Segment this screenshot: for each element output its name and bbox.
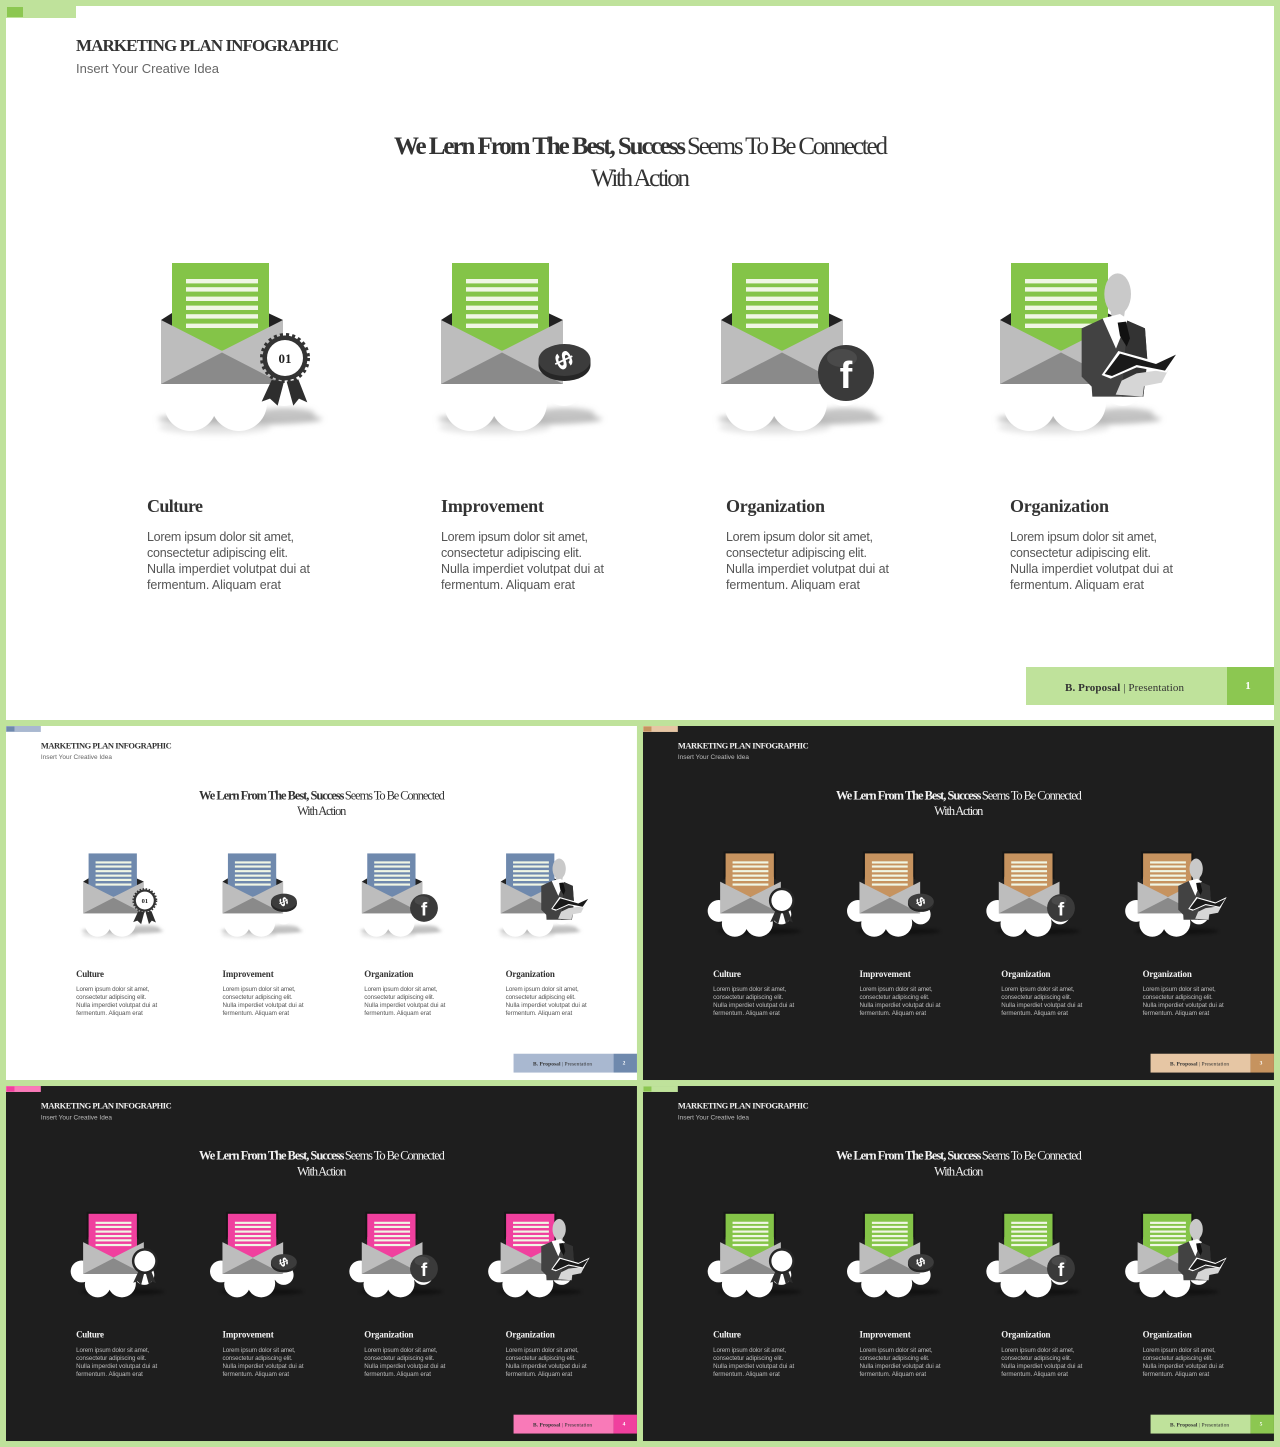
column text 4: Lorem ipsum dolor sit amet, — [1143, 986, 1216, 993]
column text 2: Nulla imperdiet volutpat dui at — [222, 1002, 304, 1009]
column text 1: consectetur adipiscing elit. — [76, 994, 147, 1001]
column text 2: fermentum. Aliquam erat — [222, 1371, 289, 1378]
column heading: Improvement: Improvement — [859, 969, 911, 979]
column heading: Organization: Organization — [726, 496, 825, 516]
column text 3: consectetur adipiscing elit. — [364, 1355, 435, 1362]
icon: envelope with ribbon badge — [71, 1212, 164, 1297]
column text 3: consectetur adipiscing elit. — [1001, 1355, 1072, 1362]
footer bar — [1151, 1415, 1274, 1434]
headline: Seems To Be Connected — [982, 1149, 1083, 1163]
icon: envelope with dollar coin — [210, 1212, 304, 1297]
headline: With Action — [934, 1165, 984, 1179]
icon: envelope with ribbon badge: 01 — [278, 351, 292, 366]
headline: We Lern From The Best, Success — [836, 788, 982, 802]
column heading: Improvement: Improvement — [859, 1330, 911, 1340]
footer bar — [514, 1054, 637, 1073]
panel: small slide, green on dark — [643, 1086, 1274, 1441]
headline: Seems To Be Connected — [345, 1149, 446, 1163]
column heading: Improvement: Improvement — [441, 496, 544, 516]
footer bar: B. Proposal | Presentation — [533, 1062, 592, 1068]
icon: envelope with facebook badge: f — [840, 355, 853, 397]
column text 3: Nulla imperdiet volutpat dui at — [726, 562, 890, 576]
icon: envelope with ribbon badge — [136, 263, 322, 434]
column text 1: Nulla imperdiet volutpat dui at — [76, 1002, 158, 1009]
column text 4: fermentum. Aliquam erat — [1143, 1371, 1210, 1378]
icon: envelope with dollar coin: $ — [913, 895, 929, 909]
column text 2: fermentum. Aliquam erat — [859, 1010, 926, 1017]
column text 1: Nulla imperdiet volutpat dui at — [76, 1363, 158, 1370]
column text 4: Nulla imperdiet volutpat dui at — [506, 1002, 587, 1009]
column heading: Organization: Organization — [506, 1330, 555, 1340]
icon: envelope with dollar coin: $ — [549, 347, 580, 374]
column text 4: Lorem ipsum dolor sit amet, — [506, 1347, 579, 1354]
headline: Seems To Be Connected — [345, 788, 446, 802]
column text 4: Lorem ipsum dolor sit amet, — [506, 986, 579, 993]
icon: envelope with dollar coin — [847, 1212, 941, 1297]
column text 1: Lorem ipsum dolor sit amet, — [713, 986, 787, 993]
footer bar: B. Proposal | Presentation — [1065, 682, 1184, 694]
icon: envelope with facebook badge — [986, 1212, 1080, 1297]
icon: envelope with businessman reading — [1125, 1212, 1227, 1297]
column text 2: Lorem ipsum dolor sit amet, — [222, 1347, 296, 1354]
column text 1: Nulla imperdiet volutpat dui at — [713, 1002, 795, 1009]
headline: With Action — [591, 165, 690, 192]
column text 2: consectetur adipiscing elit. — [859, 1355, 930, 1362]
column text 1: Nulla imperdiet volutpat dui at — [147, 562, 311, 576]
headline: We Lern From The Best, Success — [394, 133, 686, 160]
icon: envelope with facebook badge: f — [421, 1260, 428, 1281]
column text 1: consectetur adipiscing elit. — [76, 1355, 147, 1362]
footer bar: 5 — [1260, 1422, 1263, 1428]
column text 2: Nulla imperdiet volutpat dui at — [222, 1363, 304, 1370]
icon: envelope with businessman reading — [1125, 851, 1227, 937]
column text 1: Lorem ipsum dolor sit amet, — [76, 986, 150, 993]
subtitle: Insert Your Creative Idea — [678, 754, 749, 761]
subtitle: Insert Your Creative Idea — [41, 1114, 112, 1121]
footer bar: 2 — [623, 1061, 626, 1067]
icon: envelope with businessman reading — [488, 853, 590, 938]
column heading: Improvement: Improvement — [222, 969, 274, 979]
column text 2: consectetur adipiscing elit. — [441, 546, 582, 560]
column text 1: Lorem ipsum dolor sit amet, — [76, 1347, 150, 1354]
title: MARKETING PLAN INFOGRAPHIC — [678, 1100, 809, 1110]
icon: envelope with facebook badge: f — [1058, 1260, 1065, 1281]
column text 3: consectetur adipiscing elit. — [726, 546, 867, 560]
column heading: Organization: Organization — [1143, 969, 1192, 979]
column text 1: consectetur adipiscing elit. — [147, 546, 288, 560]
column text 2: Lorem ipsum dolor sit amet, — [859, 986, 933, 993]
footer bar: B. Proposal | Presentation — [533, 1423, 592, 1429]
column text 4: Nulla imperdiet volutpat dui at — [1143, 1363, 1224, 1370]
column text 4: consectetur adipiscing elit. — [506, 1355, 576, 1362]
column text 4: Nulla imperdiet volutpat dui at — [506, 1363, 587, 1370]
panel: small slide, pink on dark — [6, 1086, 637, 1441]
column text 2: Lorem ipsum dolor sit amet, — [441, 530, 588, 544]
column text 1: Lorem ipsum dolor sit amet, — [147, 530, 294, 544]
column text 3: Lorem ipsum dolor sit amet, — [1001, 1347, 1075, 1354]
column text 1: consectetur adipiscing elit. — [713, 994, 784, 1001]
column text 3: Lorem ipsum dolor sit amet, — [1001, 986, 1075, 993]
column text 2: fermentum. Aliquam erat — [222, 1010, 289, 1017]
icon: envelope with ribbon badge: 01 — [142, 898, 148, 905]
footer bar: B. Proposal | Presentation — [1170, 1062, 1229, 1068]
column text 3: Lorem ipsum dolor sit amet, — [364, 1347, 438, 1354]
column text 4: fermentum. Aliquam erat — [1010, 578, 1145, 592]
footer bar: 3 — [1260, 1061, 1263, 1067]
column heading: Culture: Culture — [76, 1330, 104, 1340]
column heading: Culture: Culture — [713, 969, 741, 979]
corner tab — [6, 6, 76, 18]
column heading: Organization: Organization — [1143, 1330, 1192, 1340]
column text 1: fermentum. Aliquam erat — [76, 1371, 143, 1378]
column heading: Organization: Organization — [506, 969, 555, 979]
icon: envelope with facebook badge — [696, 263, 882, 434]
column text 4: consectetur adipiscing elit. — [1010, 546, 1151, 560]
column text 4: consectetur adipiscing elit. — [1143, 994, 1213, 1001]
headline: Seems To Be Connected — [687, 133, 888, 160]
column text 1: fermentum. Aliquam erat — [147, 578, 282, 592]
column text 1: fermentum. Aliquam erat — [713, 1010, 780, 1017]
column text 3: Nulla imperdiet volutpat dui at — [364, 1002, 446, 1009]
icon: envelope with facebook badge — [986, 851, 1080, 937]
column text 3: fermentum. Aliquam erat — [364, 1010, 431, 1017]
column text 4: consectetur adipiscing elit. — [1143, 1355, 1213, 1362]
footer bar: B. Proposal | Presentation — [1170, 1423, 1229, 1429]
column text 3: consectetur adipiscing elit. — [364, 994, 435, 1001]
icon: envelope with dollar coin — [847, 851, 941, 937]
column text 2: Nulla imperdiet volutpat dui at — [859, 1002, 941, 1009]
icon: envelope with dollar coin — [416, 263, 602, 434]
column text 2: Lorem ipsum dolor sit amet, — [859, 1347, 933, 1354]
footer bar: 4 — [623, 1422, 626, 1428]
footer bar — [514, 1415, 637, 1434]
panel: main slide, green on white — [6, 6, 1274, 720]
icon: envelope with ribbon badge — [708, 851, 801, 937]
column heading: Organization: Organization — [364, 969, 414, 979]
icon: envelope with dollar coin: $ — [276, 895, 292, 909]
column text 1: Nulla imperdiet volutpat dui at — [713, 1363, 795, 1370]
corner tab — [6, 726, 41, 732]
headline: Seems To Be Connected — [982, 788, 1083, 802]
column text 4: Nulla imperdiet volutpat dui at — [1010, 562, 1174, 576]
column text 2: consectetur adipiscing elit. — [859, 994, 930, 1001]
title: MARKETING PLAN INFOGRAPHIC — [678, 740, 809, 750]
column text 4: fermentum. Aliquam erat — [506, 1371, 573, 1378]
column text 3: Lorem ipsum dolor sit amet, — [726, 530, 873, 544]
column text 3: fermentum. Aliquam erat — [1001, 1010, 1068, 1017]
column heading: Organization: Organization — [1001, 1330, 1051, 1340]
column text 2: fermentum. Aliquam erat — [859, 1371, 926, 1378]
column text 4: Nulla imperdiet volutpat dui at — [1143, 1002, 1224, 1009]
icon: envelope with dollar coin — [210, 853, 303, 938]
column text 3: Nulla imperdiet volutpat dui at — [1001, 1002, 1083, 1009]
icon: envelope with businessman reading — [488, 1212, 590, 1297]
icon: envelope with ribbon badge — [71, 853, 163, 938]
column text 2: fermentum. Aliquam erat — [441, 578, 576, 592]
column heading: Improvement: Improvement — [222, 1330, 274, 1340]
column text 3: Nulla imperdiet volutpat dui at — [1001, 1363, 1083, 1370]
corner tab — [643, 1086, 678, 1092]
subtitle: Insert Your Creative Idea — [41, 754, 112, 761]
column text 4: fermentum. Aliquam erat — [1143, 1010, 1210, 1017]
column heading: Organization: Organization — [1010, 496, 1109, 516]
column heading: Culture: Culture — [147, 496, 203, 516]
title: MARKETING PLAN INFOGRAPHIC — [76, 36, 339, 55]
headline: We Lern From The Best, Success — [836, 1149, 982, 1163]
icon: envelope with businessman reading — [975, 263, 1179, 434]
column text 4: fermentum. Aliquam erat — [506, 1010, 573, 1017]
column text 2: Lorem ipsum dolor sit amet, — [222, 986, 296, 993]
title: MARKETING PLAN INFOGRAPHIC — [41, 1100, 172, 1110]
headline: With Action — [297, 1165, 347, 1179]
column text 2: Nulla imperdiet volutpat dui at — [859, 1363, 941, 1370]
icon: envelope with facebook badge — [349, 853, 442, 938]
column heading: Organization: Organization — [1001, 969, 1051, 979]
icon: envelope with facebook badge: f — [1058, 898, 1065, 919]
column text 3: fermentum. Aliquam erat — [364, 1371, 431, 1378]
headline: We Lern From The Best, Success — [199, 788, 345, 802]
icon: envelope with facebook badge — [349, 1212, 443, 1297]
column text 3: fermentum. Aliquam erat — [1001, 1371, 1068, 1378]
column text 2: consectetur adipiscing elit. — [222, 1355, 293, 1362]
column text 3: Nulla imperdiet volutpat dui at — [364, 1363, 446, 1370]
corner tab — [643, 726, 678, 732]
icon: envelope with facebook badge: f — [421, 898, 428, 919]
title: MARKETING PLAN INFOGRAPHIC — [41, 740, 172, 750]
subtitle: Insert Your Creative Idea — [678, 1114, 749, 1121]
column text 3: fermentum. Aliquam erat — [726, 578, 861, 592]
column text 1: Lorem ipsum dolor sit amet, — [713, 1347, 787, 1354]
icon: envelope with dollar coin: $ — [276, 1255, 292, 1269]
footer bar — [1151, 1054, 1274, 1073]
column heading: Organization: Organization — [364, 1330, 414, 1340]
footer bar — [1026, 667, 1274, 705]
headline: We Lern From The Best, Success — [199, 1149, 345, 1163]
column text 1: fermentum. Aliquam erat — [713, 1371, 780, 1378]
column heading: Culture: Culture — [76, 969, 104, 979]
panel: small slide, blue on white — [6, 726, 637, 1080]
column text 1: consectetur adipiscing elit. — [713, 1355, 784, 1362]
subtitle: Insert Your Creative Idea — [76, 61, 220, 76]
column text 2: consectetur adipiscing elit. — [222, 994, 293, 1001]
column text 3: Lorem ipsum dolor sit amet, — [364, 986, 438, 993]
icon: envelope with dollar coin: $ — [913, 1255, 929, 1269]
column text 2: Nulla imperdiet volutpat dui at — [441, 562, 605, 576]
column heading: Culture: Culture — [713, 1330, 741, 1340]
corner tab — [6, 1086, 41, 1092]
column text 3: consectetur adipiscing elit. — [1001, 994, 1072, 1001]
column text 1: fermentum. Aliquam erat — [76, 1010, 143, 1017]
icon: envelope with ribbon badge — [708, 1212, 801, 1297]
column text 4: Lorem ipsum dolor sit amet, — [1010, 530, 1157, 544]
footer bar: 1 — [1245, 680, 1251, 692]
headline: With Action — [934, 804, 984, 818]
headline: With Action — [297, 804, 347, 818]
panel: small slide, orange on dark — [643, 726, 1274, 1080]
column text 4: consectetur adipiscing elit. — [506, 994, 576, 1001]
column text 4: Lorem ipsum dolor sit amet, — [1143, 1347, 1216, 1354]
